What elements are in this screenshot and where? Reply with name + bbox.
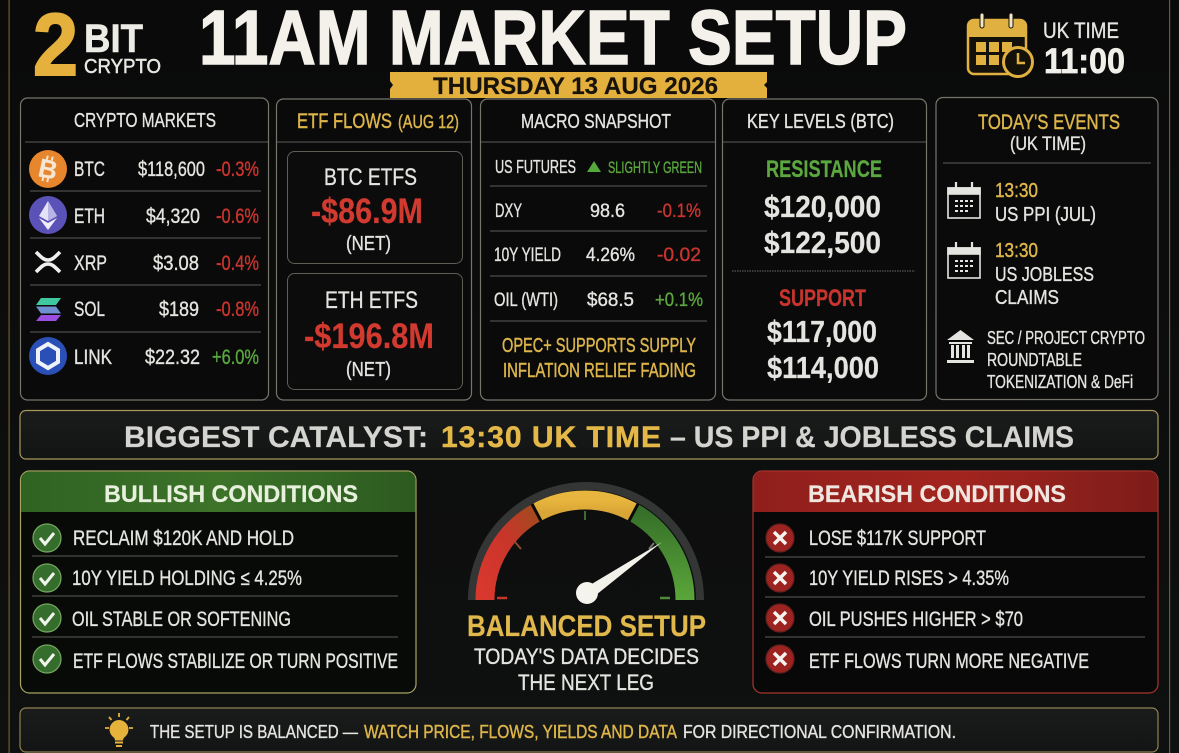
bearish item 1 [766,524,986,552]
row: oil: +0.1% [655,290,703,311]
row: BTC [74,158,259,181]
card: ETH ETFs: (NET) [346,359,391,381]
row: SOL [74,298,259,321]
biggest catalyst banner: – US PPI & JOBLESS CLAIMS [670,421,1074,454]
heading: crypto markets: CRYPTO MARKETS [74,110,216,132]
bullish item 2 [33,564,302,592]
UK time clock: 11:00 [1044,42,1125,81]
event: US jobless claims [995,240,1094,309]
support levels [767,285,879,385]
row: oil: $68.5 [587,290,634,311]
row: oil: OIL (WTI) [494,290,558,311]
biggest catalyst banner [20,410,1158,459]
UK time clock [1043,18,1125,81]
resistance levels: $122,500 [764,225,881,260]
card: BTC ETFs: (NET) [346,233,391,255]
icon: calendar jobless [948,242,980,278]
bullish header: BULLISH CONDITIONS [104,481,358,508]
event: SEC roundtable: ROUNDTABLE [987,350,1082,370]
gauge subtitle: THE NEXT LEG [518,670,654,695]
row: XRP: $3.08 [153,252,199,275]
event: US jobless claims: CLAIMS [995,287,1059,309]
panel: bullish conditions [20,471,416,693]
row: SOL: -0.8% [216,298,259,321]
row: XRP: -0.4% [216,252,259,275]
row: DXY: DXY [495,201,522,222]
row: 10Y yield: -0.02 [657,245,701,266]
panel: bearish conditions [753,471,1158,693]
row: 10Y yield: 4.26% [586,245,635,266]
macro note [502,335,696,382]
row: LINK: $22.32 [145,346,200,369]
row: SOL: $189 [159,298,199,321]
icon: ethereum [29,196,67,234]
icon: bitcoin: B [36,152,60,186]
panel: today's events [936,98,1158,400]
event: US PPI: 13:30 [995,180,1038,202]
gauge subtitle: TODAY'S DATA DECIDES [474,644,699,669]
row: US futures: US FUTURES [495,157,576,177]
icon: xrp [36,252,60,272]
event: US jobless claims: 13:30 [995,240,1038,262]
panel: ETF flows [276,99,472,400]
biggest catalyst banner: 13:30 UK TIME [441,421,661,454]
gauge verdict: BALANCED SETUP [467,610,706,643]
bullish item 3: OIL STABLE OR SOFTENING [72,608,291,631]
bearish item 1: LOSE $117K SUPPORT [809,527,986,550]
bullish header [21,472,416,512]
bearish header [754,472,1158,512]
footer message [150,722,956,742]
row: ETH: $4,320 [146,205,200,228]
support levels: $117,000 [767,314,877,349]
support levels: SUPPORT [779,285,866,312]
row: LINK: LINK [74,346,112,369]
footer message: THE SETUP IS BALANCED — [150,722,358,742]
row: SOL: SOL [74,298,105,321]
gauge: balanced setup [467,486,706,695]
icon: calendar PPI [948,182,980,218]
resistance levels: $120,000 [764,189,881,224]
icon: light bulb [105,713,133,747]
row: US futures [495,157,702,177]
bearish item 4: ETF FLOWS TURN MORE NEGATIVE [809,650,1089,673]
logo: 2BIT Crypto: CRYPTO [84,56,161,78]
heading: ETF flows: ETF FLOWS [297,110,392,133]
row: BTC: -0.3% [216,158,259,181]
footer takeaway bar [20,708,1158,752]
row: BTC: $118,600 [138,158,205,181]
row: LINK [74,346,259,369]
heading: today's events [978,111,1120,155]
bearish item 3 [766,604,1023,632]
card: ETH ETFs: -$196.8M [304,317,434,356]
resistance levels [764,156,882,260]
heading: macro snapshot: MACRO SNAPSHOT [521,111,671,133]
bullish item 1: RECLAIM $120K AND HOLD [73,527,294,550]
macro note: OPEC+ SUPPORTS SUPPLY [502,335,696,357]
bullish item 4: ETF FLOWS STABILIZE OR TURN POSITIVE [73,650,398,673]
gauge needle [576,542,662,604]
footer message: WATCH PRICE, FLOWS, YIELDS AND DATA [364,722,677,742]
row: ETH: -0.6% [216,205,259,228]
heading: key levels: KEY LEVELS (BTC) [747,111,894,133]
resistance levels: RESISTANCE [766,156,882,183]
panel: crypto markets [20,98,268,400]
row: LINK: +6.0% [212,346,259,369]
row: DXY [495,201,701,222]
panel: macro snapshot [480,99,716,400]
gauge dial [472,486,700,600]
heading: ETF flows: (AUG 12) [398,112,459,132]
gold side rail: left [8,0,10,753]
support levels: $114,000 [767,350,879,385]
logo: 2BIT Crypto: BIT [84,17,143,61]
bullish item 3 [33,604,291,632]
card: ETH ETFs: ETH ETFS [325,287,418,314]
footer message: FOR DIRECTIONAL CONFIRMATION. [683,722,956,742]
bearish item 3: OIL PUSHES HIGHER > $70 [809,608,1023,631]
card: ETH ETFs [288,274,462,390]
row: ETH [74,205,259,228]
bearish item 2: 10Y YIELD RISES > 4.35% [809,567,1009,590]
bearish item 4 [766,645,1089,673]
icon: bitcoin [29,150,67,188]
biggest catalyst banner: BIGGEST CATALYST: [124,421,428,454]
UK time clock: UK TIME [1043,18,1119,43]
bearish item 2 [766,564,1009,592]
row: BTC: BTC [74,158,105,181]
bullish item 4 [33,645,398,673]
icon: institution [947,330,974,363]
icon: solana [36,298,61,321]
row: 10Y yield: 10Y YIELD [494,245,561,266]
row: ETH: ETH [74,205,105,228]
heading: today's events: (UK TIME) [1010,134,1086,155]
logo: 2BIT Crypto [33,0,161,94]
bullish item 1 [33,524,294,552]
bearish header: BEARISH CONDITIONS [808,481,1066,508]
event: US jobless claims: US JOBLESS [995,264,1094,286]
row: oil [494,290,703,311]
event: US PPI [995,180,1096,226]
date banner: THURSDAY 13 AUG 2026 [433,73,718,100]
card: BTC ETFs [288,152,462,264]
icon: chainlink [29,337,67,375]
row: XRP: XRP [74,252,107,275]
gauge subtitle [474,644,699,695]
row: DXY: -0.1% [657,201,701,222]
row: XRP [74,252,259,275]
heading: today's events: TODAY'S EVENTS [978,111,1120,134]
row: DXY: 98.6 [590,201,625,222]
icon: calendar and clock [968,13,1032,76]
card: BTC ETFs: BTC ETFS [324,164,417,191]
gold side rail: right [1169,0,1170,753]
event: SEC roundtable: TOKENIZATION & DeFi [987,372,1133,392]
panel: key levels [722,99,926,400]
event: SEC roundtable [987,328,1145,392]
card: BTC ETFs: -$86.9M [311,192,423,231]
row: US futures: SLIGHTLY GREEN [608,158,702,177]
macro note: INFLATION RELIEF FADING [503,360,696,382]
bullish item 2: 10Y YIELD HOLDING ≤ 4.25% [72,567,302,590]
event: US PPI: US PPI (JUL) [995,204,1096,226]
row: 10Y yield [494,245,701,266]
